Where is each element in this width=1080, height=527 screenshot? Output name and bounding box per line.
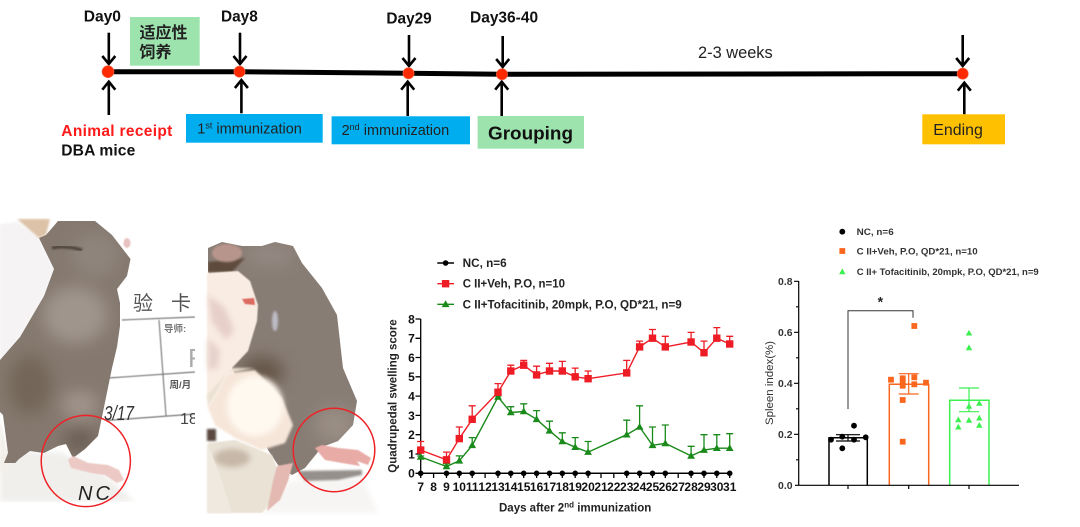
x tick labels: 30 xyxy=(710,480,724,494)
line chart: swelling score xyxy=(388,258,737,514)
y tick labels: 8 xyxy=(408,312,415,326)
x tick labels: 14 xyxy=(504,480,518,494)
x tick labels: 25 xyxy=(646,480,659,494)
Day36-40 marker: Day36-40 xyxy=(470,10,538,27)
second immunization box xyxy=(332,116,470,144)
paw xyxy=(68,456,124,483)
paper background xyxy=(0,293,195,502)
paper background: 3/17 xyxy=(104,403,135,425)
legend: NC, n=6 xyxy=(463,258,507,270)
y tick labels: 0.8 xyxy=(778,277,793,288)
data points: vehicle xyxy=(888,323,929,445)
first immunization box: st xyxy=(205,120,213,130)
paper background: 验 xyxy=(133,292,153,315)
tail xyxy=(267,463,293,511)
x axis title: nd xyxy=(564,500,574,510)
acclimation box xyxy=(130,17,200,66)
x tick labels: 11 xyxy=(466,480,479,494)
x tick labels: 20 xyxy=(581,480,595,494)
timeline xyxy=(61,9,1005,160)
x tick labels: 28 xyxy=(684,480,698,494)
Day29 marker: Day29 xyxy=(386,10,432,27)
y tick labels: 1 xyxy=(408,447,415,461)
paper background: 周/月 xyxy=(170,380,191,391)
ending box xyxy=(922,114,1005,144)
axes xyxy=(794,281,1019,489)
x tick labels: 26 xyxy=(659,480,672,494)
paper background: F xyxy=(188,343,204,373)
grouping box: Grouping xyxy=(488,124,573,144)
mouse body xyxy=(207,240,359,480)
y tick labels: 2 xyxy=(408,428,415,442)
bars xyxy=(829,384,989,485)
paper background: 卡 xyxy=(171,292,191,315)
y tick labels: 4 xyxy=(408,390,415,404)
duration label: 2-3 weeks xyxy=(698,44,773,62)
y tick labels: 5 xyxy=(408,370,415,384)
second immunization box: nd xyxy=(350,122,360,132)
legend xyxy=(437,258,682,311)
paper background: 导师: xyxy=(164,324,186,335)
end marker xyxy=(956,35,971,114)
x tick labels xyxy=(417,480,737,494)
legend: C II+Tofacitinib, 20mpk, P.O, QD*21, n=9 xyxy=(463,299,682,311)
upper glove finger xyxy=(207,271,258,408)
first immunization box xyxy=(186,114,323,143)
x tick labels: 13 xyxy=(491,480,505,494)
second immunization box: 2 xyxy=(342,123,350,139)
Day8 marker xyxy=(221,9,258,113)
x tick labels: 17 xyxy=(543,480,556,494)
first immunization box: 1 xyxy=(197,121,205,137)
error bars xyxy=(836,374,979,441)
data points: NC xyxy=(828,423,869,451)
x tick labels: 7 xyxy=(417,480,424,494)
acclimation box: 饲养 xyxy=(140,42,172,62)
timeline axis xyxy=(108,72,963,74)
circle: swollen paw xyxy=(293,408,375,492)
y axis title: Spleen index(%) xyxy=(764,341,776,425)
Day0 marker xyxy=(84,9,121,115)
first immunization box: immunization xyxy=(212,121,302,137)
y tick labels: 7 xyxy=(408,332,415,346)
Day29 marker xyxy=(386,10,432,116)
significance bracket xyxy=(848,294,913,409)
paper background: 18 xyxy=(180,411,198,428)
thumb xyxy=(208,370,293,450)
x axis title: Days after 2 xyxy=(499,502,564,514)
grouping box xyxy=(478,116,584,149)
y tick labels: 0 xyxy=(408,467,415,481)
animal receipt label xyxy=(61,123,172,160)
gloved hand xyxy=(0,219,54,473)
x tick labels: 16 xyxy=(530,480,544,494)
y tick labels: 0.0 xyxy=(778,481,793,492)
ending box: Ending xyxy=(933,122,983,139)
x tick labels: 8 xyxy=(430,480,437,494)
x tick labels: 18 xyxy=(556,480,569,494)
y tick labels: 0.6 xyxy=(778,328,793,339)
x tick labels: 9 xyxy=(443,480,450,494)
series: tofacitinib xyxy=(417,393,734,469)
legend: NC, n=6 xyxy=(857,227,894,238)
x tick labels: 23 xyxy=(620,480,634,494)
animal receipt label: Animal receipt xyxy=(61,123,172,140)
handwritten NC: NC xyxy=(78,483,113,505)
data points: tofacitinib xyxy=(955,330,982,430)
x tick labels: 22 xyxy=(607,480,621,494)
paper and shadow xyxy=(262,470,378,513)
mouse body xyxy=(0,218,135,463)
acclimation box: 适应性 xyxy=(140,23,188,42)
Day8 marker: Day8 xyxy=(221,9,258,26)
bar chart: spleen index xyxy=(764,227,1039,492)
axes xyxy=(416,319,731,478)
legend: C II+ Tofacitinib, 20mpk, P.O, QD*21, n=9 xyxy=(857,267,1039,278)
x tick labels: 10 xyxy=(453,480,466,494)
y tick labels: 3 xyxy=(408,409,415,423)
swollen paw xyxy=(315,445,371,466)
x axis title: immunization xyxy=(574,502,651,514)
glove gap xyxy=(207,429,216,441)
x tick labels: 21 xyxy=(594,480,608,494)
x tick labels: 12 xyxy=(478,480,492,494)
legend: C II+Veh, P.O, QD*21, n=10 xyxy=(857,246,978,257)
x tick labels: 19 xyxy=(569,480,582,494)
y tick labels xyxy=(408,312,415,481)
x tick labels: 15 xyxy=(517,480,531,494)
photo: arthritic mouse xyxy=(207,240,378,513)
series: vehicle xyxy=(417,328,733,463)
y tick labels: 0.2 xyxy=(778,430,793,441)
animal receipt label: DBA mice xyxy=(61,143,136,160)
x tick labels: 24 xyxy=(633,480,647,494)
y tick labels xyxy=(778,277,793,492)
y tick labels: 6 xyxy=(408,351,415,365)
Day0 marker: Day0 xyxy=(84,9,121,26)
ear xyxy=(124,238,130,248)
Day36-40 marker xyxy=(470,10,538,117)
x tick labels: 27 xyxy=(672,480,685,494)
x tick labels: 29 xyxy=(697,480,711,494)
photo: normal control mouse xyxy=(0,218,204,518)
legend xyxy=(839,227,1039,278)
y axis title: Quadrupedal swelling score xyxy=(388,319,400,473)
second immunization box: immunization xyxy=(360,123,449,139)
lower glove xyxy=(207,440,277,513)
series: NC xyxy=(418,470,732,476)
y tick labels: 0.4 xyxy=(778,379,793,390)
significance bracket: * xyxy=(878,294,884,310)
legend: C II+Veh, P.O, n=10 xyxy=(463,279,565,291)
x tick labels: 31 xyxy=(723,480,737,494)
circle: normal paw xyxy=(41,415,130,507)
